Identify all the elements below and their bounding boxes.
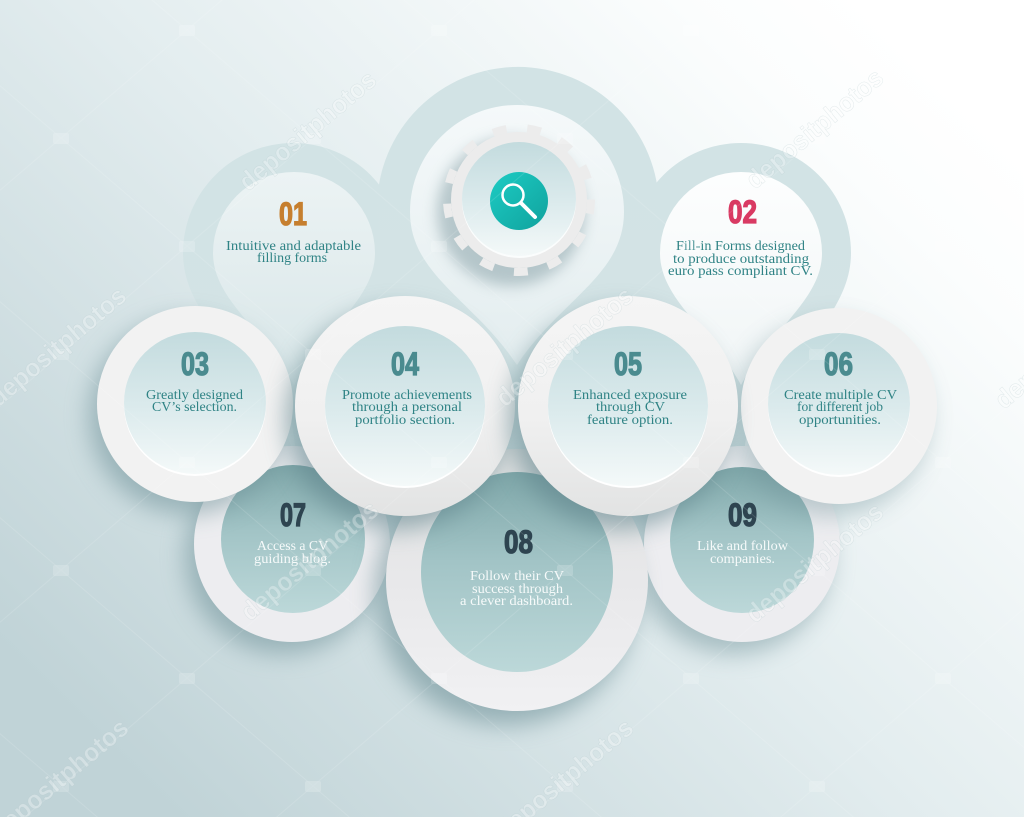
ring: centre [377, 67, 659, 440]
number 01: 01 [279, 196, 307, 232]
text 01: filling forms [257, 251, 327, 266]
watermark text: depositphotos [490, 280, 639, 413]
panel 03 [89, 306, 293, 514]
text 04: portfolio section. [355, 413, 455, 428]
number 09: 09 [728, 497, 757, 533]
text 06: for different job [797, 400, 883, 415]
drop: centre inner [410, 105, 624, 365]
text 03: Greatly designed [146, 388, 243, 403]
panel 06 [733, 308, 937, 516]
ring: join between rings [280, 230, 760, 480]
text 05 [573, 388, 687, 428]
top ring cluster [183, 67, 851, 480]
ring: left [183, 143, 403, 450]
text 03 [146, 388, 243, 415]
text 05: feature option. [587, 413, 673, 428]
text 02 [668, 239, 813, 279]
panel 08 [375, 449, 648, 725]
text 08: a clever dashboard. [460, 594, 573, 609]
number 07: 07 [280, 497, 306, 533]
number 05: 05 [614, 346, 642, 382]
text 02: euro pass compliant CV. [668, 264, 813, 279]
panel 09 [635, 446, 840, 654]
text 04: Promote achievements [342, 388, 472, 403]
text 04: through a personal [352, 400, 462, 415]
text 09 [697, 539, 789, 567]
text 04 [342, 388, 472, 428]
text 07 [254, 539, 331, 567]
panel 07 [185, 446, 390, 654]
icon: magnifier [490, 172, 548, 230]
number 03: 03 [181, 346, 209, 382]
text 06: Create multiple CV [784, 388, 897, 403]
ring: right [631, 143, 851, 450]
text 07: Access a CV [257, 539, 328, 554]
watermark text: depositphotos [740, 62, 889, 195]
text 09: companies. [710, 552, 775, 567]
panel 02 [668, 194, 813, 279]
text 02: Fill-in Forms designed [676, 239, 805, 254]
number 06: 06 [824, 346, 853, 382]
drop: left inner [213, 172, 375, 385]
number 04: 04 [391, 346, 419, 382]
text 07: guiding blog. [254, 552, 331, 567]
text 09: Like and follow [697, 539, 789, 554]
panel 01 [226, 196, 361, 266]
text 08 [460, 569, 573, 609]
text 01: Intuitive and adaptable [226, 239, 361, 254]
text 01 [226, 239, 361, 266]
panel 04 [286, 296, 515, 529]
watermark text: depositphotos [233, 64, 382, 197]
text 05: through CV [596, 400, 665, 415]
text 05: Enhanced exposure [573, 388, 687, 403]
text 08: success through [472, 582, 563, 597]
text 06 [784, 388, 897, 428]
panel 05 [509, 296, 738, 529]
gear icon [437, 128, 591, 286]
number 02: 02 [728, 194, 757, 230]
text 03: CV’s selection. [152, 400, 237, 415]
drop: right inner [660, 172, 822, 385]
watermark text: depositphotos [740, 496, 889, 629]
watermark text: depositphotos [235, 494, 384, 627]
text 06: opportunities. [799, 413, 881, 428]
text 02: to produce outstanding [673, 252, 809, 267]
number 08: 08 [504, 524, 533, 560]
text 08: Follow their CV [470, 569, 564, 584]
